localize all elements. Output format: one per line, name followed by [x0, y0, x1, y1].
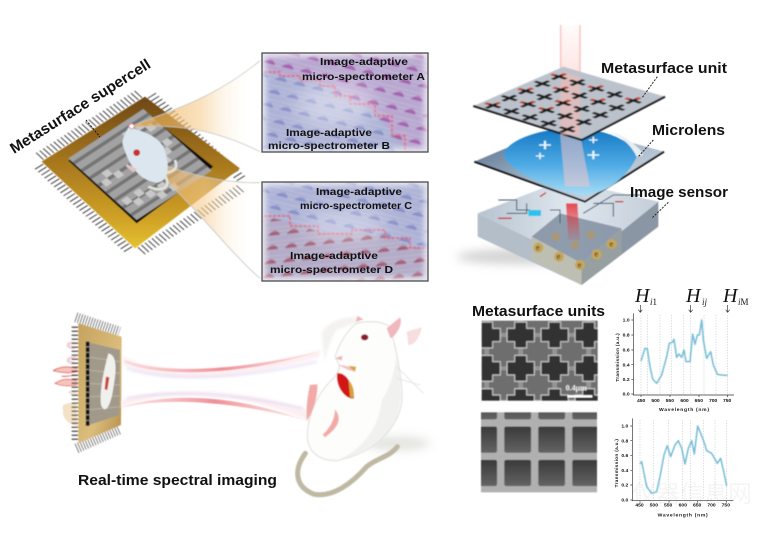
label: metasurface supercell: Metasurface supercell	[7, 56, 154, 157]
label: metasurface unit: Metasurface unit	[601, 61, 727, 77]
electrons	[533, 231, 617, 270]
chart: spectrum 2: 750	[722, 503, 730, 509]
SEM image: square unit	[481, 412, 597, 492]
icon: chip pins	[33, 90, 247, 255]
icon: side-on chip	[75, 317, 122, 448]
panel: micro-spectrometers A and B: micro-spectrometer B	[268, 140, 390, 152]
labels: band symbols: H	[685, 285, 702, 307]
chart: spectrum 2: 0.8	[621, 438, 628, 444]
chart: spectrum 2: 600	[679, 503, 687, 509]
chart: spectrum 1: 0.6	[623, 348, 630, 354]
chart: spectrum 1: 750	[723, 398, 732, 404]
panel: micro-spectrometers C and D: micro-spectrometer D	[270, 264, 393, 276]
panel: micro-spectrometers A and B: micro-spectrometer A	[302, 71, 425, 83]
arrows: band markers	[638, 305, 730, 312]
chart: spectrum 1: 0.8	[623, 333, 630, 339]
chart: spectrum 1: 550	[666, 398, 674, 404]
SEM image: cross unit: 0.4μm	[566, 384, 587, 393]
chart: spectrum 2: 0.2	[621, 483, 628, 489]
chart: spectrum 2: Transmission (a.u.)	[614, 439, 619, 487]
text: spectrometer A: Image-adaptive	[320, 56, 408, 68]
electrons: e	[578, 262, 582, 269]
labels: band symbols: H	[634, 285, 651, 307]
labels: band symbols: iM	[738, 297, 749, 307]
metasurface grid	[68, 109, 213, 223]
panel: micro-spectrometers C and D: micro-spectrometer C	[300, 200, 412, 212]
icon: mouse on chip	[123, 123, 176, 189]
SEM image: cross unit	[482, 321, 598, 401]
labels: band symbols: H	[722, 285, 739, 307]
chart: spectrum 1: 0.2	[623, 377, 630, 383]
chart: spectrum 2: 450	[635, 503, 644, 509]
chart: spectrum 1: 0.0	[623, 392, 630, 398]
label: microlens: Microlens	[652, 123, 725, 139]
panel: micro-spectrometers A and B	[262, 53, 428, 152]
incoming light	[561, 25, 580, 77]
chart: spectrum 2: 700	[707, 503, 716, 509]
labels: band symbols: i1	[650, 297, 657, 307]
cones to panels	[132, 61, 260, 152]
panel: real-time imaging scene	[53, 316, 430, 495]
chart: spectrum 1	[615, 313, 734, 413]
text: spectrometer C: Image-adaptive	[316, 186, 402, 198]
chart: spectrum 1: Transmission (a.u.)	[615, 333, 620, 382]
metasurface plate	[473, 67, 665, 140]
microlens	[474, 124, 664, 202]
panel: micro-spectrometers A and B: Image-adaptive	[286, 127, 372, 139]
chart: spectrum 2: 0.0	[621, 498, 628, 504]
chart: spectrum 2: 500	[650, 503, 658, 509]
watermark: 仪器信息网	[632, 481, 752, 508]
chart: spectrum 2: Wavelength (nm)	[658, 513, 708, 519]
labels: band symbols: ij	[702, 297, 708, 307]
chart: spectrum 1: 600	[680, 398, 689, 404]
chart: spectrum 1: 700	[709, 398, 718, 404]
electrons: e	[594, 252, 598, 259]
spectra behind chip	[53, 343, 77, 427]
electrons: e	[557, 254, 561, 261]
chart: spectrum 1: 0.4	[623, 362, 630, 368]
electrons: e	[609, 241, 613, 248]
labels: band symbols	[634, 285, 749, 307]
chart: spectrum 2: 0.6	[621, 453, 628, 459]
spectral beams	[122, 350, 320, 422]
panel: SEM images and spectra	[481, 305, 734, 519]
panel: metasurface supercell chip	[33, 61, 260, 278]
panel: micro-spectrometers C and D: Image-adaptive	[290, 250, 378, 262]
chart: spectrum 2: 650	[693, 503, 702, 509]
label: real-time spectral imaging: Real-time spectral imaging	[78, 472, 277, 489]
gold package	[42, 97, 240, 248]
chart: spectrum 2: 550	[664, 503, 673, 509]
chart: spectrum 1: Wavelength (nm)	[659, 407, 709, 413]
chart: spectrum 1: 650	[695, 398, 703, 404]
icon: white rat	[298, 316, 430, 495]
chart: spectrum 2	[614, 418, 733, 519]
chart: spectrum 1: 500	[651, 398, 660, 404]
electrons: e	[536, 245, 540, 252]
label: image sensor: Image sensor	[630, 185, 728, 201]
panel: exploded pixel stack	[457, 25, 668, 285]
chart: spectrum 2: 0.4	[621, 468, 628, 474]
heading: metasurface units: Metasurface units	[472, 303, 605, 320]
image sensor block	[457, 180, 658, 285]
chart: spectrum 2: 1.0	[621, 424, 628, 430]
chart: spectrum 1: 1.0	[623, 318, 630, 324]
panel: micro-spectrometers C and D	[262, 182, 428, 281]
chart: spectrum 1: 450	[637, 398, 646, 404]
